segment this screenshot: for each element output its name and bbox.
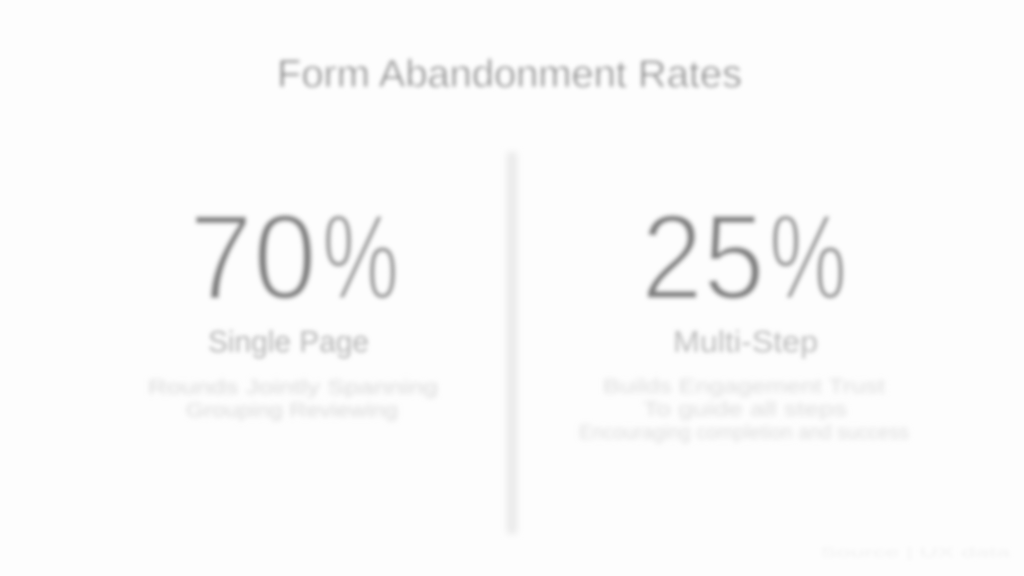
label: single page: Single Page [208,324,369,359]
description: single page [148,377,438,422]
description: multi-step: To guide all steps [643,399,847,421]
stat: 25%: % [769,189,847,325]
stat: 25% [641,189,847,325]
footer note: Source | UX data [820,544,1010,560]
description: multi-step: Encouraging completion and success [579,422,909,444]
description: single page: Grouping Reviewing [186,400,398,422]
panel: single page [148,189,438,422]
description: multi-step: Builds Engagement Trust [603,376,886,398]
stat: 70%: % [322,189,399,325]
stat: 70% [189,189,399,325]
description: single page: Rounds Jointly Spanning [148,377,438,399]
label: multi-step: Multi-Step [673,324,818,359]
title: Form Abandonment Rates [277,53,742,96]
stat: 25%: 25 [641,189,765,325]
divider [507,152,517,534]
panel: multi-step [579,189,909,444]
description: multi-step [579,376,909,444]
stat: 70%: 70 [189,189,317,325]
